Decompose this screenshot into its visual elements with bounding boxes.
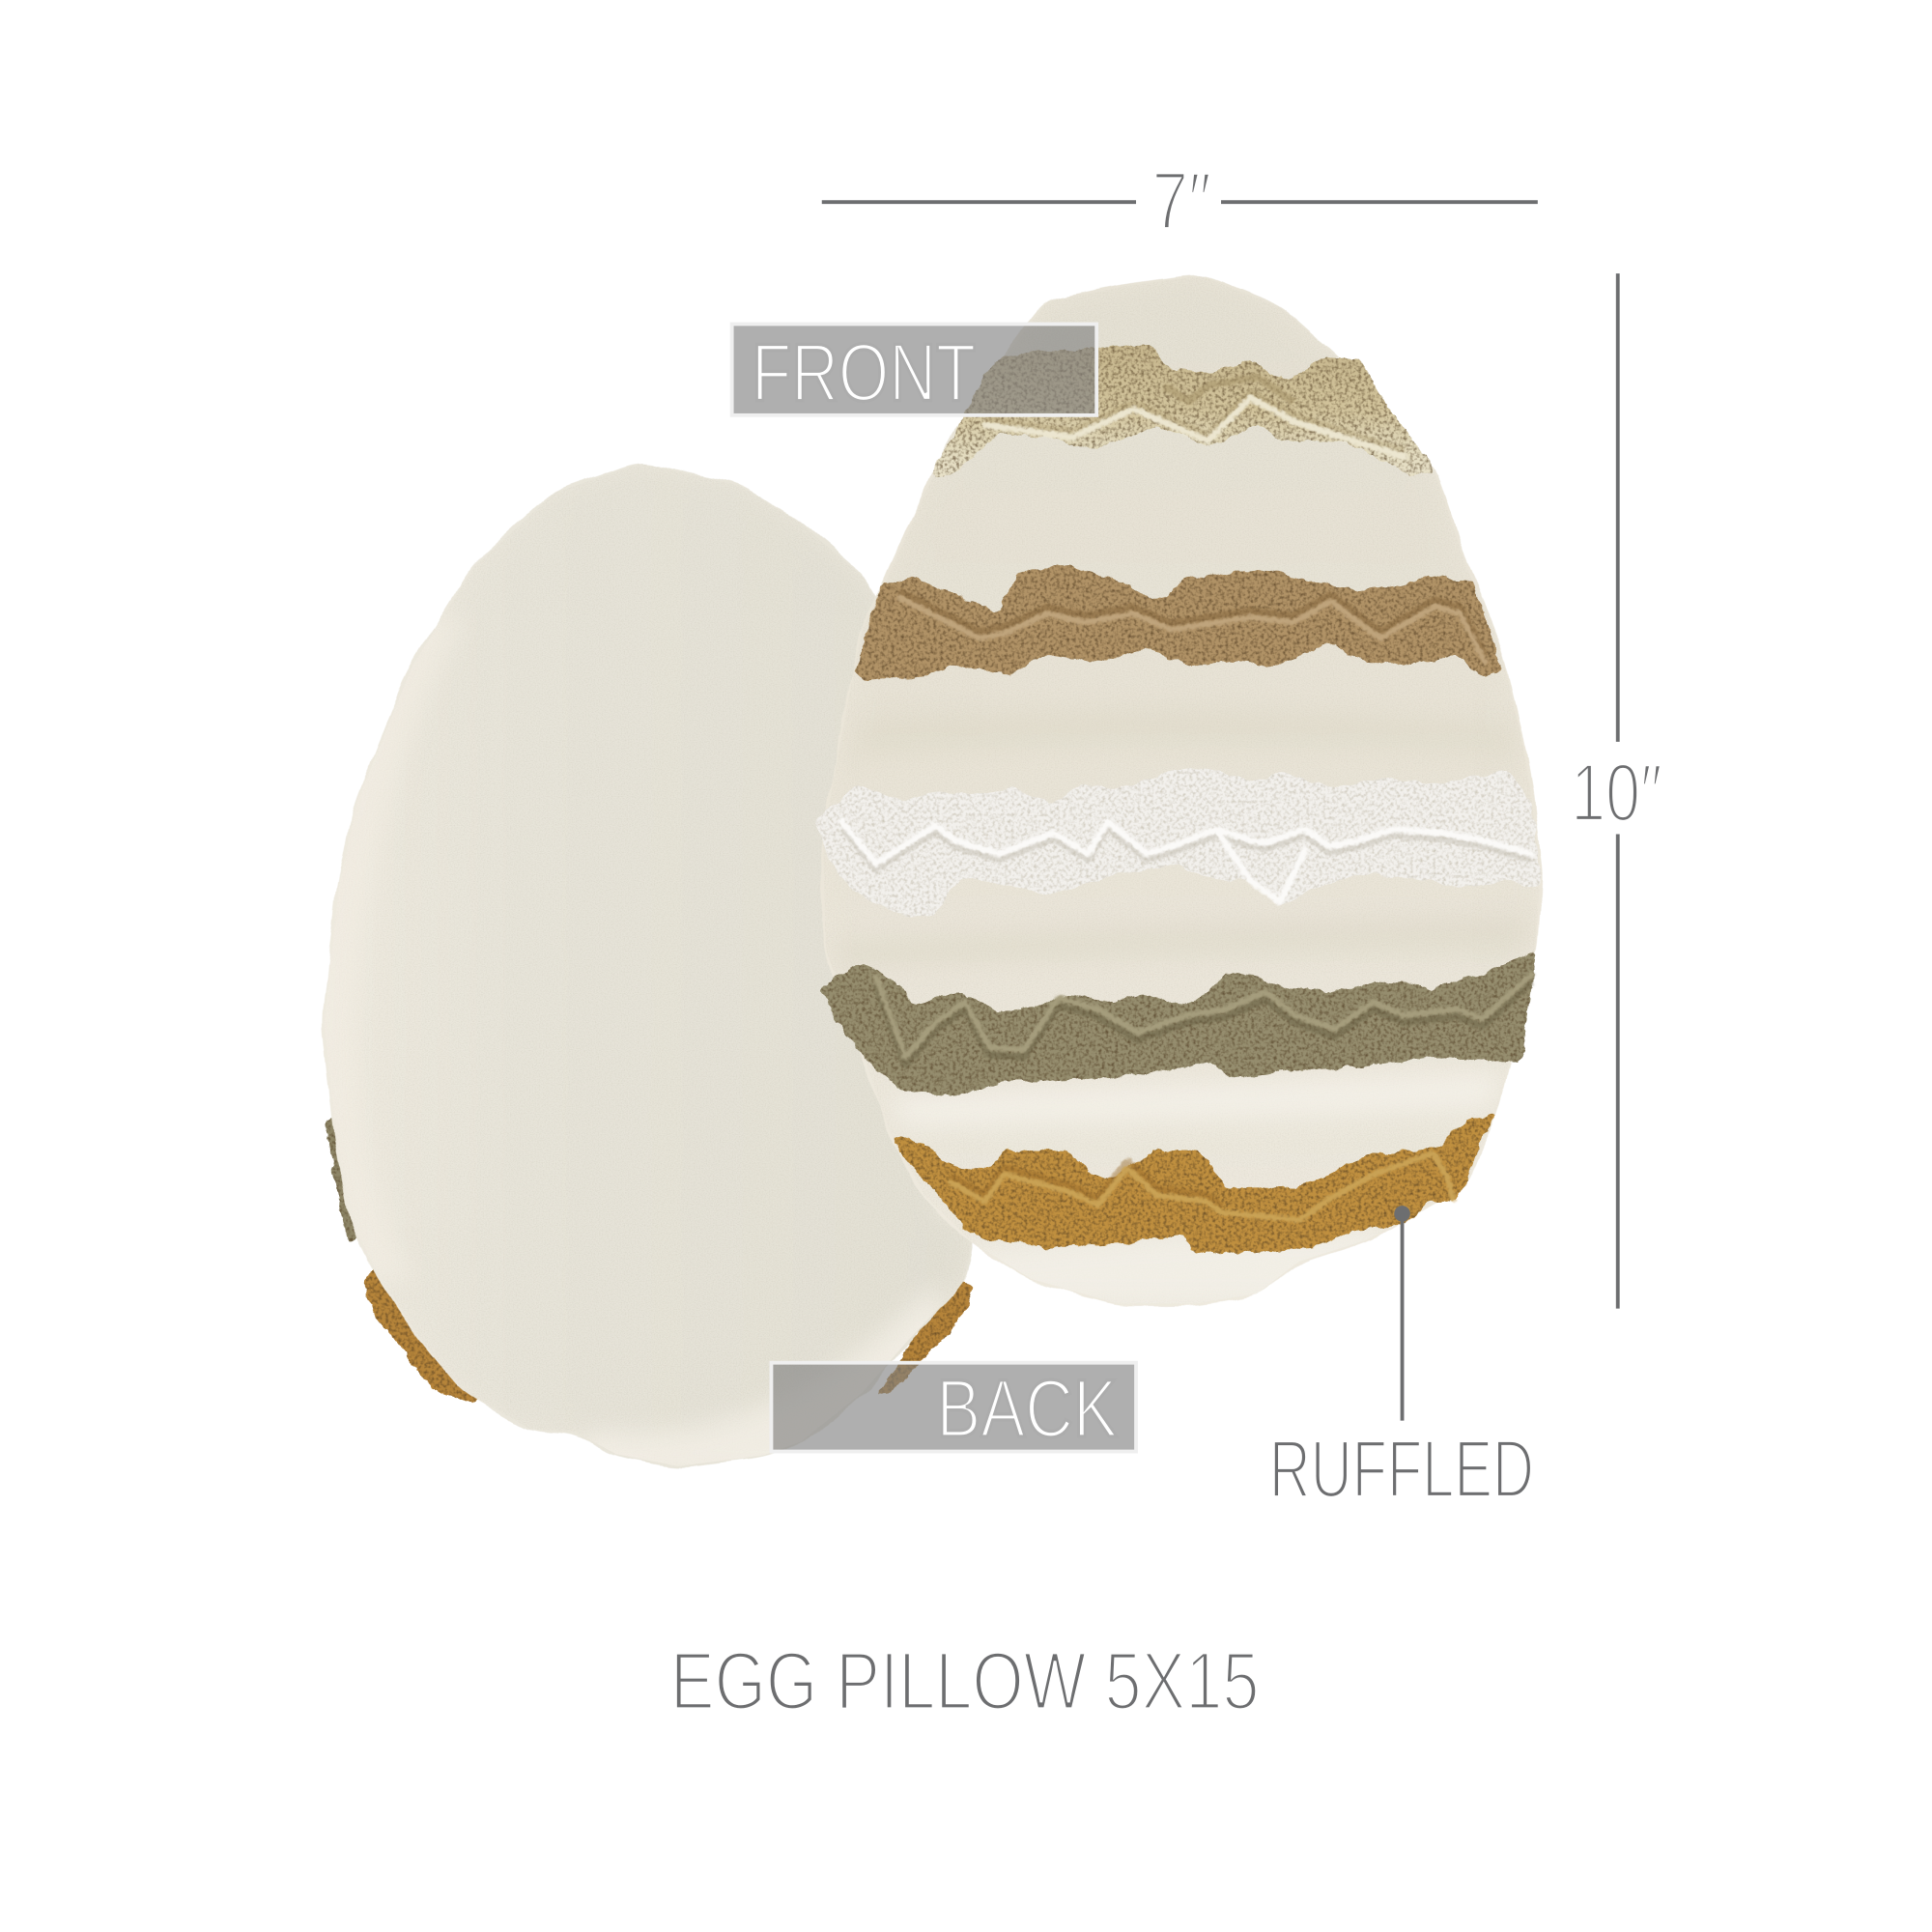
- label: FRONT: FRONT: [752, 327, 976, 418]
- width dimension: 7 inches: 7″: [1152, 156, 1211, 246]
- ruffle band 1: cream tan: [930, 345, 1435, 475]
- height dimension: 10 inches: 10″: [1571, 747, 1662, 838]
- ruffle band 4: olive: [819, 950, 1537, 1095]
- label: BACK: [771, 1363, 1136, 1454]
- title: EGG PILLOW 5X15: [670, 1635, 1260, 1726]
- ruffle band 2: brown: [856, 565, 1503, 681]
- callout: ruffled: [1269, 1206, 1534, 1515]
- ruffle band 3: white: [817, 768, 1542, 916]
- back pillow body: [324, 464, 974, 1466]
- pillow: back view: [296, 456, 985, 1479]
- front pillow body: [823, 276, 1540, 1303]
- ruffle edges peeking behind back pillow: [326, 1119, 976, 1403]
- ruffle band 5: mustard: [889, 1109, 1497, 1254]
- pillow: front view with ruffles: [813, 271, 1552, 1319]
- label: BACK: BACK: [936, 1363, 1118, 1454]
- callout: ruffled: RUFFLED: [1269, 1424, 1534, 1515]
